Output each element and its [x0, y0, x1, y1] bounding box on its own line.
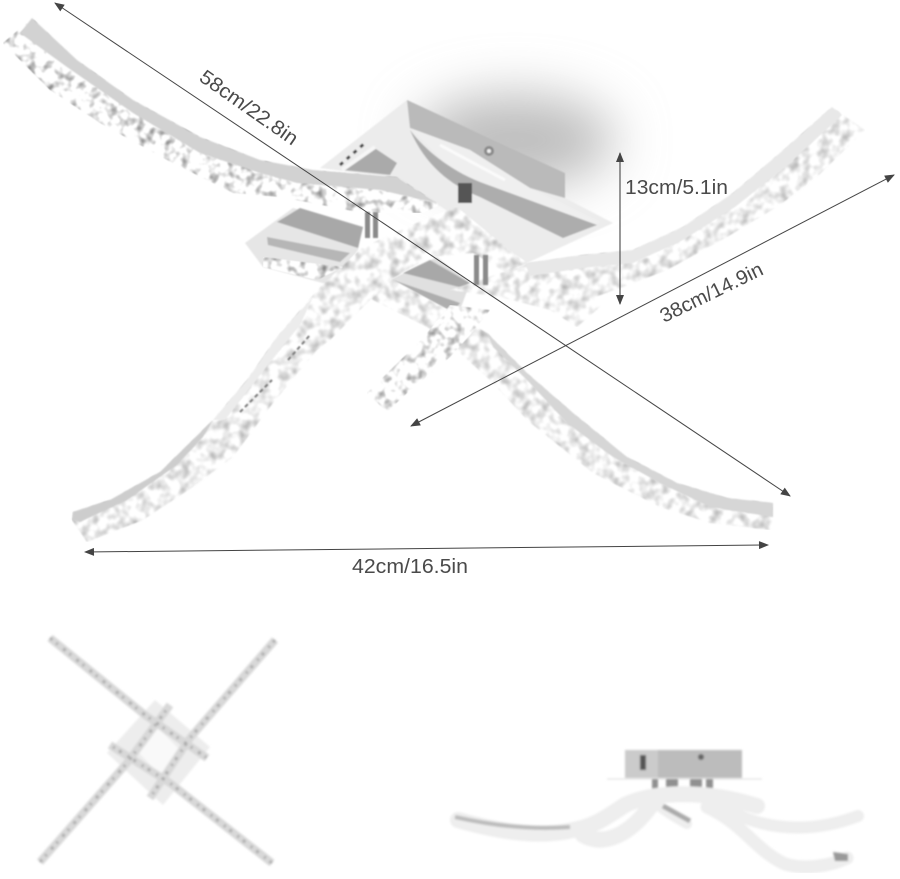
dimension: height 13cm: 13cm/5.1in — [625, 177, 728, 199]
lamp base plate and box — [245, 100, 613, 313]
main lamp photo — [3, 18, 865, 542]
chrome mounting posts — [365, 212, 488, 285]
side view of lamp — [455, 750, 858, 867]
lamp arm: top left — [3, 18, 440, 213]
dimension: width 42cm: 42cm/16.5in — [352, 556, 468, 578]
dimension: diagonal 58cm: 58cm/22.8in — [195, 66, 302, 150]
dimension: diagonal 38cm — [411, 175, 894, 426]
dimension: diagonal 38cm: 38cm/14.9in — [657, 259, 767, 327]
lamp arm: top right — [450, 107, 865, 327]
lamp arm: bottom left — [72, 207, 527, 542]
lamp arm: short centre — [367, 305, 490, 412]
top view of lamp — [40, 638, 275, 863]
lamp arm: bottom right — [360, 280, 773, 530]
left arm back crystal — [263, 257, 343, 280]
ceiling shadow — [415, 94, 615, 186]
dimension: width 42cm — [85, 545, 768, 578]
